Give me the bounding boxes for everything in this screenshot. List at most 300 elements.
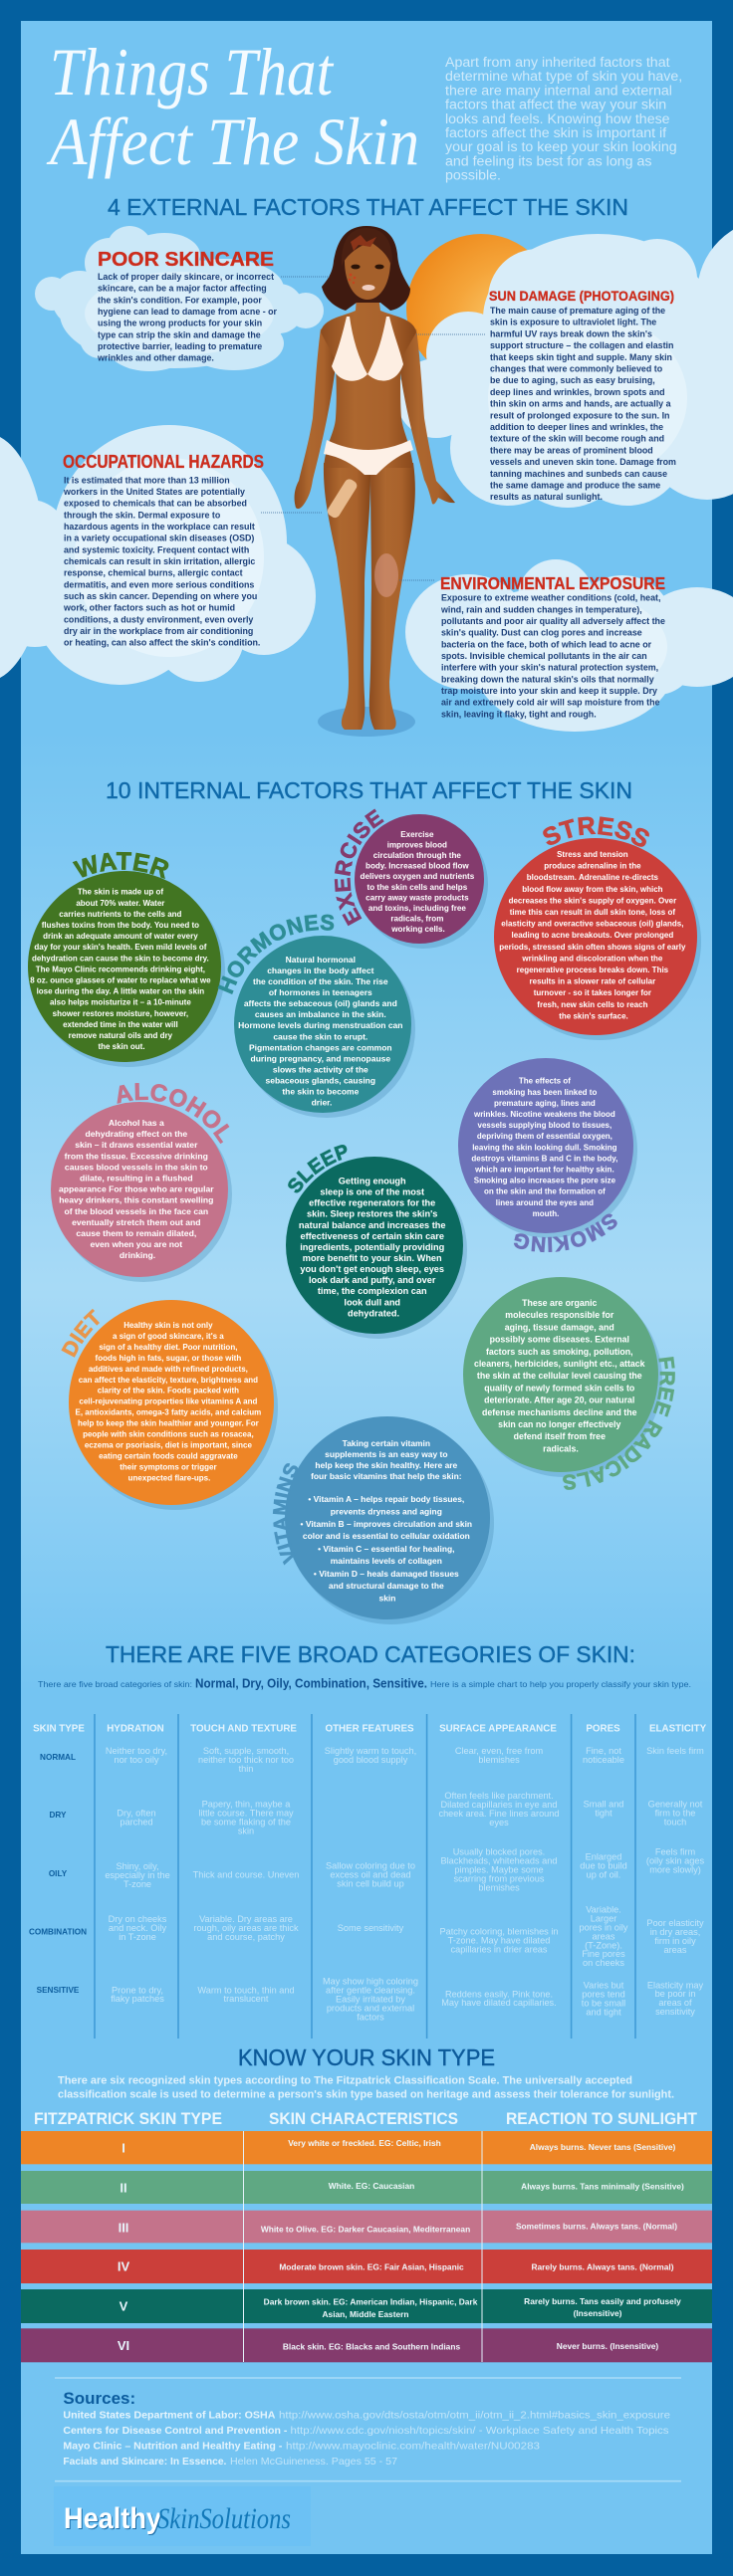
text: stress: time this can result in dull skin tone, loss of xyxy=(510,908,675,917)
text: sun damage: harmful UV rays break down the skin's xyxy=(490,328,652,338)
text: exercise: to the skin cells and helps xyxy=(366,883,468,892)
text: smoking: smoking has been linked to xyxy=(492,1088,597,1097)
row IV: IV xyxy=(118,2259,129,2273)
text: vitamins: color and is essential to cellular oxidation xyxy=(303,1531,470,1541)
text: hormones: Hormone levels during menstruation can xyxy=(238,1020,402,1030)
intro paragraph: there are many internal and external xyxy=(445,83,672,99)
text: occupational hazards: or heating, can also affect the skin's condition. xyxy=(64,638,260,648)
text: occupational hazards: workers in the United States are potentially xyxy=(63,487,245,497)
row: sensitive: flaky patches xyxy=(111,1994,164,2004)
row I: Always burns. Never tans (Sensitive) xyxy=(530,2142,676,2152)
text: environmental exposure: trap moisture into your skin and keep it supple. Dry xyxy=(441,686,657,696)
text: free radicals: aging, tissue damage, and xyxy=(505,1322,614,1332)
row: combination: Poor elasticity xyxy=(646,1918,704,1928)
table header: PORES xyxy=(586,1724,620,1734)
row: normal: NORMAL xyxy=(40,1753,76,1762)
row: combination: rough, oily areas are thick xyxy=(193,1923,299,1933)
text: sleep: look dull and xyxy=(344,1297,400,1307)
skin type table xyxy=(29,1714,707,2039)
row II: Always burns. Tans minimally (Sensitive) xyxy=(521,2182,684,2192)
row: oily: Blackheads, whiteheads and xyxy=(441,1856,557,1866)
row: oily: Enlarged xyxy=(586,1851,621,1861)
text: water: drink an adequate amount of water every xyxy=(43,932,198,941)
text: occupational hazards: dry air in the workplace from air conditioning xyxy=(64,626,253,636)
text: occupational hazards: through the skin. Dermal exposure to xyxy=(64,510,221,520)
row: oily: blemishes xyxy=(478,1882,520,1892)
row: oily: more slowly) xyxy=(649,1865,701,1875)
text: environmental exposure: interfere with your skin's natural protection system, xyxy=(441,663,658,673)
row VI: VI xyxy=(118,2338,129,2353)
row: normal: Clear, even, free from xyxy=(455,1746,544,1756)
text: vitamins: • Vitamin C – essential for healing, xyxy=(318,1544,455,1554)
row: combination: Larger xyxy=(591,1914,616,1924)
bubble: free radicals xyxy=(463,1277,675,1490)
text: exercise: and toxins, including free xyxy=(368,904,466,913)
row II xyxy=(120,2180,684,2196)
row: sensitive: translucent xyxy=(224,1994,269,2004)
text: water: lose during the day. A little water on the skin xyxy=(37,987,204,996)
bubble: diet xyxy=(62,1300,278,1510)
row: normal: Skin feels firm xyxy=(646,1746,704,1756)
source lines: Mayo Clinic – Nutrition and Healthy Eating - xyxy=(63,2441,283,2453)
torso xyxy=(321,297,416,468)
row: oily xyxy=(49,1847,705,1892)
row: dry: cheek area. Fine lines around xyxy=(438,1809,560,1819)
row: combination: Some sensitivity xyxy=(338,1923,404,1933)
row: combination: Variable. Dry areas are xyxy=(199,1914,293,1924)
text: alcohol: drinking. xyxy=(120,1250,155,1260)
back hair xyxy=(322,226,410,311)
label: water: WATER xyxy=(72,852,169,880)
text: sleep: Getting enough xyxy=(339,1177,406,1186)
text: occupational hazards: exposed to chemicals that can be absorbed xyxy=(64,499,247,509)
heading: know your skin type: KNOW YOUR SKIN TYPE xyxy=(238,2044,495,2070)
row: sensitive: and tight xyxy=(586,2007,621,2017)
title: Affect The Skin xyxy=(46,104,419,179)
heading: five categories: THERE ARE FIVE BROAD CATEGORIES OF SKIN: xyxy=(106,1641,635,1667)
row: oily: up of oil. xyxy=(587,1869,620,1879)
text: hormones: of hormones in teenagers xyxy=(269,987,372,997)
text: sleep: time, the complexion can xyxy=(318,1286,427,1296)
text: diet: people with skin conditions such as rosacea, xyxy=(83,1429,254,1439)
text: environmental exposure: skin's quality. Dust can clog pores and increase xyxy=(441,628,642,638)
panel: poor skincare xyxy=(97,249,279,363)
text: water: about 70% water. Water xyxy=(76,899,164,908)
text: vitamins: help keep the skin healthy. Here are xyxy=(315,1460,458,1470)
categories intro line: There are five broad categories of skin: xyxy=(38,1679,192,1689)
text: poor skincare: type can strip the skin and damage the xyxy=(98,329,261,339)
row: sensitive: May have dilated capillaries. xyxy=(441,1998,557,2008)
cloud: occupational hazards xyxy=(0,425,316,685)
text: occupational hazards: response, chemical burns, allergic contact xyxy=(64,568,243,578)
text: sun damage: vessels and uneven skin tone. Damage from xyxy=(490,457,676,467)
row III xyxy=(119,2220,677,2236)
text: diet: unexpected flare-ups. xyxy=(128,1473,210,1482)
heading: environmental exposure: ENVIRONMENTAL EXPOSURE xyxy=(440,573,665,593)
row: oily: due to build xyxy=(580,1860,627,1870)
panel: sun damage xyxy=(489,288,678,502)
eyes xyxy=(351,265,384,269)
row: oily: Thick and course. Uneven xyxy=(193,1870,299,1880)
row: oily: Sallow coloring due to xyxy=(326,1861,415,1871)
source lines: Centers for Disease Control and Prevention - xyxy=(63,2425,288,2437)
text: alcohol: appearance For those who are regular xyxy=(59,1184,214,1194)
text: stress: leading to acne breakouts. Over prolonged xyxy=(512,931,673,940)
text: smoking: on the skin and the formation of xyxy=(484,1187,606,1196)
panel: occupational hazards xyxy=(63,452,264,648)
text: sun damage: that keeps skin tight and supple. Many skin xyxy=(490,352,672,362)
intro paragraph: and feeling its best for as long as xyxy=(445,153,651,169)
source lines: Helen McGuineness. Pages 55 - 57 xyxy=(230,2456,397,2468)
cloud: environmental exposure xyxy=(405,559,733,732)
text: sun damage: skin is exposure to ultraviolet light. The xyxy=(490,318,656,327)
label: stress: STRESS xyxy=(543,816,649,847)
row: dry: Papery, thin, maybe a xyxy=(202,1800,291,1810)
text: poor skincare: using the wrong products for your skin xyxy=(98,319,262,328)
text: vitamins: Taking certain vitamin xyxy=(343,1438,430,1448)
bubble: stress xyxy=(494,816,701,1040)
text: water: carries nutrients to the cells and xyxy=(59,910,182,919)
text: water: also helps moisturize it – a 10-minute xyxy=(50,998,191,1007)
text: water: day for your skin's health. Even mild levels of xyxy=(34,943,207,952)
row: combination: areas xyxy=(664,1945,687,1955)
text: free radicals: skin can no longer effectively xyxy=(498,1419,620,1429)
text: occupational hazards: hazardous agents in the workplace can result xyxy=(64,522,255,532)
text: free radicals: These are organic xyxy=(522,1298,598,1308)
text: occupational hazards: It is estimated that more than 13 million xyxy=(64,475,230,485)
text: alcohol: of the blood vessels in the face can xyxy=(64,1206,208,1216)
row: normal: Fine, not xyxy=(586,1746,621,1756)
text: environmental exposure: pollutants and poor air quality all adversely affect the xyxy=(441,616,665,626)
row: dry: Small and xyxy=(584,1800,623,1810)
intro paragraph: your goal is to keep your skin looking xyxy=(445,139,677,155)
text: alcohol: cause them to remain dilated, xyxy=(76,1228,196,1238)
text: alcohol: Alcohol has a xyxy=(109,1118,164,1128)
row: oily: Usually blocked pores. xyxy=(453,1847,545,1857)
row: dry: parched xyxy=(120,1818,153,1827)
row V: Asian, Middle Eastern xyxy=(322,2309,409,2319)
text: diet: additives and made with refined products, xyxy=(89,1365,248,1374)
text: hormones: the skin to become xyxy=(282,1086,360,1096)
text: diet: Healthy skin is not only xyxy=(123,1321,213,1330)
text: occupational hazards: work, other factors such as hot or humid xyxy=(63,603,235,613)
row: sensitive xyxy=(37,1976,703,2022)
text: hormones: causes an imbalance in the skin. xyxy=(255,1009,386,1019)
row III: Sometimes burns. Always tans. (Normal) xyxy=(516,2222,677,2232)
heading: 10 internal factors: 10 INTERNAL FACTORS THAT AFFECT THE SKIN xyxy=(106,777,632,803)
row: combination: pores in oily xyxy=(579,1923,628,1933)
heading: sun damage: SUN DAMAGE (PHOTOAGING) xyxy=(489,288,674,304)
text: diet: can affect the elasticity, texture, brightness and xyxy=(79,1376,258,1385)
fitzpatrick header: SKIN CHARACTERISTICS xyxy=(269,2110,458,2128)
text: exercise: radicals, from xyxy=(390,914,443,923)
row: sensitive: pores tend xyxy=(582,1990,625,2000)
row: dry: tight xyxy=(595,1809,612,1819)
row: normal xyxy=(40,1746,704,1774)
row: normal: blemishes xyxy=(478,1755,520,1765)
text: diet: eczema or psoriasis, diet is important, since xyxy=(85,1440,252,1449)
arms xyxy=(295,328,337,509)
legs xyxy=(324,463,370,730)
row: oily: scarring from previous xyxy=(454,1873,545,1883)
row: combination: Fine pores xyxy=(582,1949,625,1959)
text: alcohol: heavy drinkers, this constant swelling xyxy=(59,1195,213,1205)
row: sensitive: Easily irritated by xyxy=(336,1994,405,2004)
heading: 4 external factors: 4 EXTERNAL FACTORS THAT AFFECT THE SKIN xyxy=(108,194,628,220)
bubble: exercise xyxy=(335,808,488,949)
row: combination: Patchy coloring, blemishes in xyxy=(440,1927,558,1937)
text: vitamins: and structural damage to the xyxy=(329,1581,444,1591)
text: water: The skin is made up of xyxy=(78,888,163,897)
text: environmental exposure: spots. Invisible chemical pollutants in the air can xyxy=(441,651,647,661)
text: diet: help to keep the skin healthier and younger. For xyxy=(78,1419,259,1428)
text: water: shower restores moisture, however, xyxy=(53,1009,188,1018)
text: smoking: mouth. xyxy=(533,1209,559,1218)
text: free radicals: defense mechanisms decline and the xyxy=(482,1407,637,1417)
row IV: Moderate brown skin. EG: Fair Asian, Hispanic xyxy=(279,2262,464,2272)
fitzpatrick header xyxy=(34,2110,697,2128)
text: exercise: body. Increased blood flow xyxy=(366,862,469,871)
intro paragraph: possible. xyxy=(445,168,501,184)
text: sleep: dehydrated. xyxy=(348,1308,399,1318)
label: free radicals: FREE RADICALS xyxy=(563,1357,675,1490)
text: smoking: destroys vitamins B and C in the body, xyxy=(471,1154,617,1163)
text: diet: clarity of the skin. Foods packed with xyxy=(98,1387,239,1395)
row: normal: Neither too dry, xyxy=(106,1746,167,1756)
bubble: alcohol xyxy=(51,1083,232,1282)
row: dry: Dry, often xyxy=(117,1809,156,1819)
text: exercise: working cells. xyxy=(390,925,445,934)
text: diet: cell-rejuvenating properties like vitamins A and xyxy=(79,1397,258,1406)
text: sun damage: the same damage and produce the same xyxy=(490,480,660,490)
bikini top xyxy=(332,317,403,381)
table header: ELASTICITY xyxy=(649,1724,707,1734)
text: vitamins: skin xyxy=(379,1594,395,1604)
row: combination: Variable. xyxy=(586,1905,621,1915)
text: water: extended time in the water will xyxy=(63,1020,178,1029)
text: free radicals: factors such as smoking, pollution, xyxy=(486,1347,633,1357)
title: Things That xyxy=(50,34,335,109)
row: oily: pimples. Maybe some xyxy=(454,1865,544,1875)
text: water: flushes toxins from the body. You need to xyxy=(42,921,199,930)
text: exercise: circulation through the xyxy=(373,851,461,860)
text: sleep: ingredients, potentially providing xyxy=(300,1242,444,1252)
text: hormones: sebaceous glands, causing xyxy=(266,1075,375,1085)
row: combination: and course, patchy xyxy=(207,1932,285,1942)
categories intro line: Here is a simple chart to help you properly classify your skin type. xyxy=(430,1679,691,1689)
text: sun damage: be due to aging, such as easy bruising, xyxy=(490,375,655,385)
cloud: poor skincare xyxy=(35,226,324,371)
row: normal: thin xyxy=(239,1764,253,1774)
text: smoking: vessels supplying blood to tissues, xyxy=(478,1121,611,1130)
text: occupational hazards: conditions, a dusty environment, even overly xyxy=(64,614,253,624)
title xyxy=(46,34,419,179)
text: sleep: you don't get enough sleep, eyes xyxy=(300,1264,444,1274)
bubble: smoking xyxy=(458,1058,637,1252)
shadow under feet xyxy=(318,707,415,737)
source lines: http://www.osha.gov/dts/osta/otm/otm_ii/otm_ii_2.html#basics_skin_exposure xyxy=(279,2409,670,2421)
row: sensitive: Warm to touch, thin and xyxy=(197,1985,295,1995)
text: sleep: effectiveness of certain skin care xyxy=(300,1231,444,1241)
row: normal: nor too oily xyxy=(115,1755,159,1765)
text: occupational hazards: dermatitis, and even more serious conditions xyxy=(64,579,254,589)
text: hormones: changes in the body affect xyxy=(267,966,374,975)
row: dry: Often feels like parchment. xyxy=(444,1791,554,1801)
label: alcohol: ALCOHOL xyxy=(117,1083,229,1145)
text: poor skincare: skincare, can be a major factor affecting xyxy=(98,284,267,294)
bikini bottom xyxy=(324,440,413,475)
fitzpatrick table xyxy=(21,2110,712,2362)
row: dry: DRY xyxy=(50,1811,67,1820)
text: smoking: leaving the skin looking dull. Smoking xyxy=(472,1143,617,1152)
row: combination: (T-Zone). xyxy=(585,1940,622,1950)
text: stress: Stress and tension xyxy=(557,850,628,859)
text: stress: fresh, new skin cells to reach xyxy=(537,1000,648,1009)
text: vitamins: four basic vitamins that help the skin: xyxy=(311,1471,462,1481)
row: sensitive: Reddens easily. Pink tone. xyxy=(445,1989,553,1999)
text: stress: elasticity and overactive sebaceous (oil) glands, xyxy=(501,920,683,929)
text: poor skincare: wrinkles and other damage. xyxy=(97,353,214,363)
row: normal: noticeable xyxy=(583,1755,624,1765)
row II: White. EG: Caucasian xyxy=(329,2181,414,2191)
text: hormones: drier. xyxy=(312,1098,332,1108)
row: sensitive: sensitivity xyxy=(655,2007,695,2017)
row: combination: capillaries in drier areas xyxy=(450,1945,548,1955)
row V: V xyxy=(120,2299,128,2313)
table header: HYDRATION xyxy=(107,1724,164,1734)
row: combination xyxy=(29,1905,704,1968)
row V xyxy=(120,2296,681,2319)
row: normal: Soft, supple, smooth, xyxy=(203,1746,289,1756)
row: sensitive: areas of xyxy=(658,1998,692,2008)
text: sun damage: texture of the skin will become rough and xyxy=(490,434,664,444)
text: stress: turnover - so it takes longer for xyxy=(534,988,651,997)
text: sun damage: changes that were commonly believed to xyxy=(490,364,663,374)
row: sensitive: Elasticity may xyxy=(647,1980,703,1990)
text: alcohol: skin – it draws essential water xyxy=(75,1140,198,1150)
text: diet: sign of a healthy diet. Poor nutrition, xyxy=(99,1343,237,1352)
row I: I xyxy=(122,2140,125,2156)
text: vitamins: supplements is an easy way to xyxy=(325,1449,447,1459)
text: hormones: affects the sebaceous (oil) glands and xyxy=(244,998,397,1008)
source lines: United States Department of Labor: OSHA xyxy=(63,2409,276,2421)
label: smoking: SMOKING xyxy=(514,1214,617,1252)
row VI xyxy=(118,2338,658,2353)
row: oily: skin cell build up xyxy=(337,1879,404,1889)
row VI: Black skin. EG: Blacks and Southern Indians xyxy=(283,2341,460,2351)
text: diet: E, antioxidants, omega-3 fatty acids, and calcium xyxy=(76,1408,261,1417)
text: alcohol: dehydrating effect on the xyxy=(85,1129,187,1139)
label: sleep: SLEEP xyxy=(288,1145,347,1192)
heading: occupational hazards: OCCUPATIONAL HAZARDS xyxy=(63,452,264,472)
text: diet: foods high in fats, sugar, or those with xyxy=(96,1354,241,1363)
text: exercise: carry away waste products xyxy=(366,893,469,902)
row: combination: firm in oily xyxy=(654,1936,696,1946)
row: sensitive: factors xyxy=(357,2012,384,2022)
row IV xyxy=(118,2259,674,2273)
sources heading: Sources: xyxy=(63,2389,135,2408)
text: smoking: The effects of xyxy=(519,1077,571,1086)
text: vitamins: prevents dryness and aging xyxy=(331,1507,442,1517)
intro paragraph: factors that affect the way your skin xyxy=(445,98,666,113)
text: sleep: more benefit to your skin. When xyxy=(303,1253,442,1263)
row: sensitive: to be small xyxy=(582,1999,625,2009)
text: smoking: which are important for healthy skin. xyxy=(474,1165,614,1175)
text: environmental exposure: skin, leaving it flaky, tight and rough. xyxy=(441,709,597,719)
text: stress: regenerative process breaks down. This xyxy=(517,966,669,974)
text: poor skincare: hygiene can lead to damage from acne - or xyxy=(98,307,278,317)
row: normal: good blood supply xyxy=(334,1755,408,1765)
text: alcohol: from the tissue. Excessive drinking xyxy=(65,1151,208,1161)
text: water: dehydration can cause the skin to become dry. xyxy=(32,954,209,963)
row: oily: OILY xyxy=(49,1869,68,1878)
text: stress: bloodstream. Adrenaline re-directs xyxy=(527,873,659,882)
label: vitamins: VITAMINS xyxy=(273,1463,298,1565)
row: sensitive: Varies but xyxy=(584,1981,624,1991)
pointer lines xyxy=(261,277,486,580)
logo: healthy skin solutions: Healthy xyxy=(64,2502,161,2535)
text: alcohol: causes blood vessels in the skin to xyxy=(65,1162,208,1172)
text: exercise: improves blood xyxy=(387,841,447,850)
text: vitamins: • Vitamin A – helps repair body tissues, xyxy=(308,1494,464,1504)
row: sensitive: products and external xyxy=(327,2003,414,2013)
row: sensitive: be poor in xyxy=(655,1989,695,1999)
row: dry: be some flaking of the xyxy=(201,1818,291,1827)
row: dry: touch xyxy=(664,1818,686,1827)
text: smoking: lines around the eyes and xyxy=(496,1198,594,1207)
text: stress: the skin's surface. xyxy=(559,1011,628,1020)
bubble: water xyxy=(28,852,225,1067)
text: stress: wrinkling and discoloration when the xyxy=(521,954,663,963)
source lines xyxy=(63,2409,670,2468)
row I xyxy=(122,2138,676,2156)
row: sensitive: Prone to dry, xyxy=(112,1985,163,1995)
rash xyxy=(374,553,398,597)
row: sensitive: after gentle cleansing. xyxy=(326,1985,415,1995)
row: oily: T-zone xyxy=(123,1879,151,1889)
face xyxy=(345,243,390,300)
text: sun damage: result of prolonged exposure to the sun. In xyxy=(490,410,669,420)
row: dry: skin xyxy=(238,1826,254,1836)
row: combination: in dry areas, xyxy=(650,1927,700,1937)
text: sleep: sleep is one of the most xyxy=(320,1187,424,1197)
row: dry: firm to the xyxy=(655,1809,695,1819)
text: sun damage: support structure – the collagen and elastin xyxy=(490,340,673,350)
text: free radicals: deteriorate. After age 20, our natural xyxy=(484,1395,634,1405)
text: water: remove natural oils and dry xyxy=(69,1031,173,1040)
text: environmental exposure: wind, rain and sudden changes in temperature), xyxy=(440,604,642,614)
row: oily: Shiny, oily, xyxy=(116,1861,159,1871)
text: water: the skin out. xyxy=(98,1042,145,1051)
text: environmental exposure: air and extremely cold air will sap moisture from the xyxy=(441,698,660,708)
row V: Dark brown skin. EG: American Indian, Hispanic, Dark xyxy=(264,2296,478,2306)
table header xyxy=(33,1724,707,1734)
text: alcohol: even when you are not xyxy=(90,1239,182,1249)
row: combination: COMBINATION xyxy=(29,1927,87,1937)
row: dry: Dilated capillaries in eye and xyxy=(441,1800,557,1810)
text: free radicals: radicals. xyxy=(543,1443,579,1453)
table header: SKIN TYPE xyxy=(33,1724,85,1734)
paragraph: fitzpatrick scale xyxy=(58,2074,674,2100)
row I: Very white or freckled. EG: Celtic, Irish xyxy=(288,2138,441,2148)
fitzpatrick header: FITZPATRICK SKIN TYPE xyxy=(34,2110,222,2128)
bubble: sleep xyxy=(286,1145,467,1339)
row: combination: on cheeks xyxy=(583,1958,624,1968)
text: environmental exposure: breaking down the natural skin's oils that normally xyxy=(441,674,654,684)
text: free radicals: cleaners, herbicides, sunlight etc., attack xyxy=(474,1359,645,1369)
text: environmental exposure: Exposure to extreme weather conditions (cold, heat, xyxy=(441,593,660,603)
row: dry xyxy=(50,1791,703,1836)
